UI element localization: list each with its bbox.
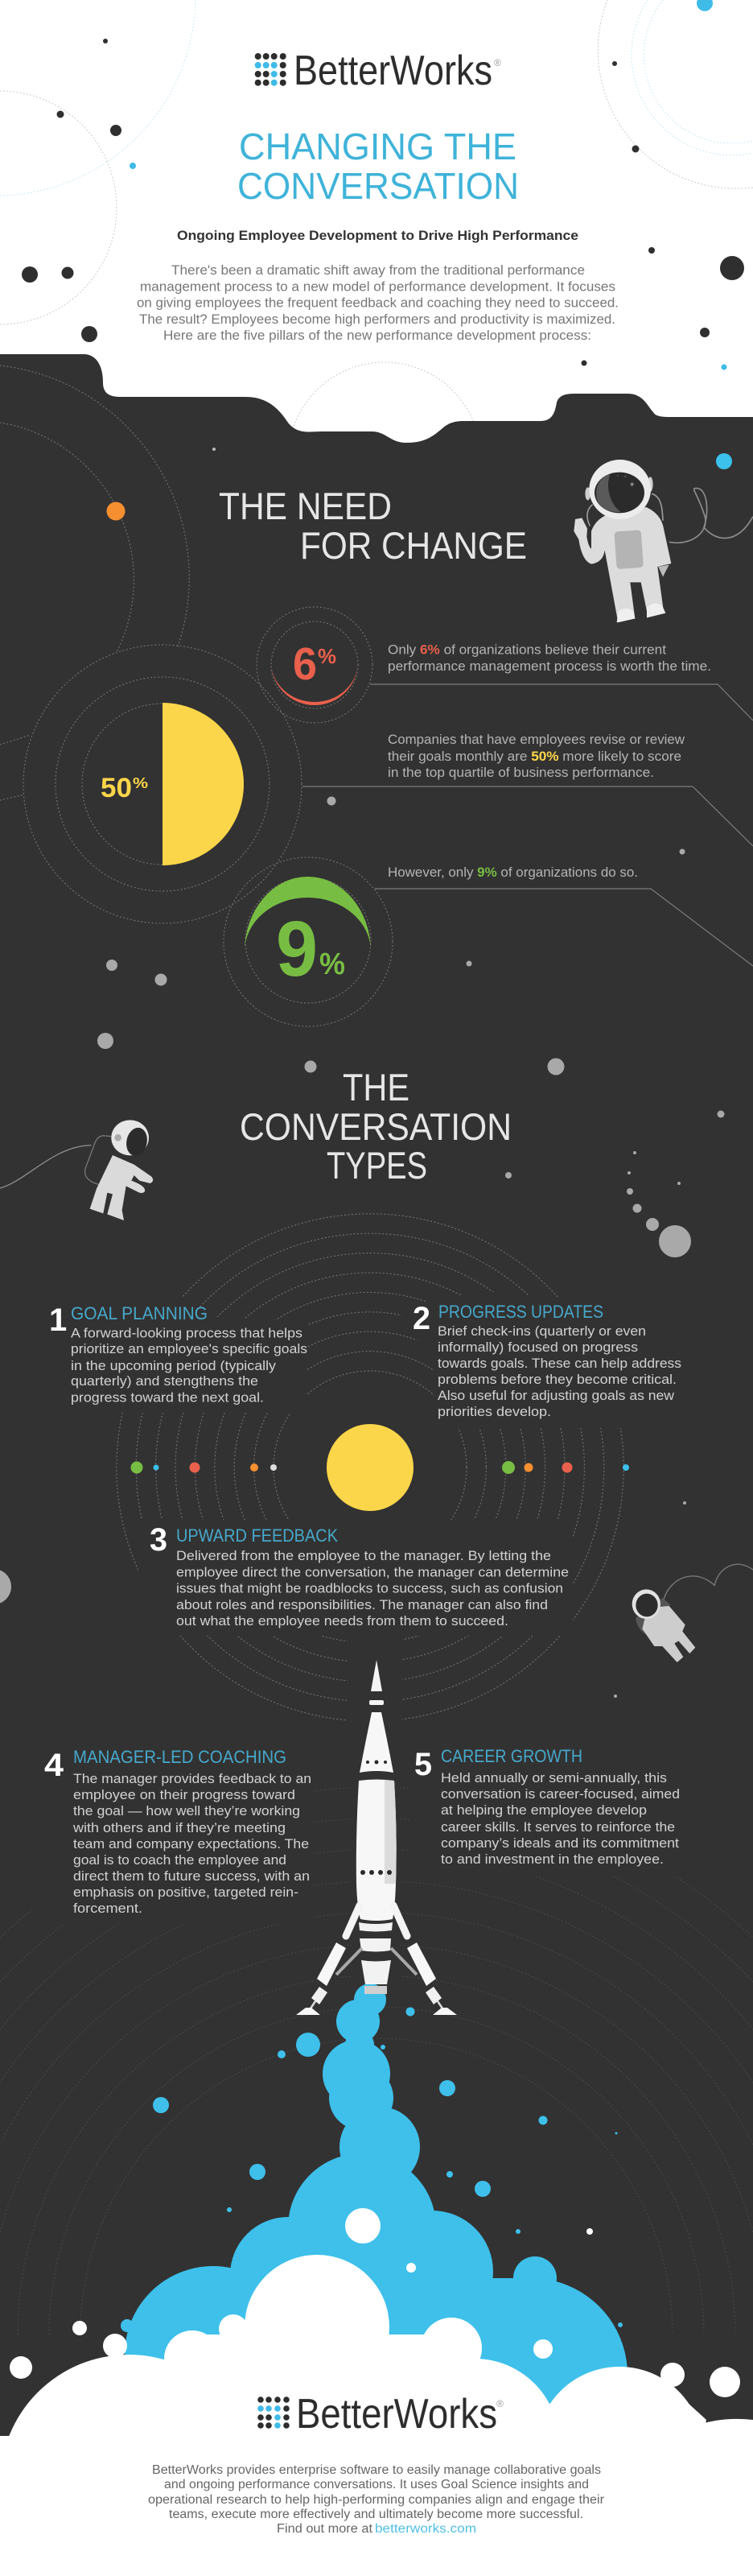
panel: 1 goal planning: progress toward the next goal. bbox=[71, 1391, 264, 1406]
chart: 50 percent half circle: 50 bbox=[101, 773, 132, 803]
panel: 4 manager-led coaching: emphasis on positive, targeted rein- bbox=[73, 1885, 298, 1900]
heading: the need for change bbox=[219, 485, 527, 567]
panel: 1 goal planning: quarterly) and stengthens the bbox=[71, 1374, 258, 1389]
footer text: betterworks.com bbox=[375, 2522, 476, 2536]
panel: 5 career growth: company’s ideals and its commitment bbox=[441, 1836, 679, 1851]
text: 50 percent stat: Companies that have employees revise or review bbox=[388, 733, 685, 747]
panel: 2 progress updates: 2 bbox=[413, 1301, 430, 1336]
space dots: coloured and grey bbox=[0, 453, 732, 1698]
panel: 2 progress updates bbox=[413, 1301, 681, 1419]
intro paragraph: There's been a dramatic shift away from the traditional performance bbox=[171, 262, 585, 278]
panel: 2 progress updates: PROGRESS UPDATES bbox=[438, 1302, 603, 1322]
logo: BetterWorks header: BetterWorks bbox=[294, 47, 492, 94]
panel: 3 upward feedback: 3 bbox=[150, 1522, 167, 1558]
panel: 3 upward feedback bbox=[150, 1522, 569, 1629]
logo: BetterWorks footer: BetterWorks bbox=[296, 2391, 497, 2438]
text: 6 percent stat: performance management process is worth the time. bbox=[388, 659, 711, 674]
text: 50 percent stat: their goals monthly are 50% more likely to score bbox=[388, 749, 681, 764]
chart: 6 percent arc: 6 bbox=[293, 638, 317, 690]
panel: 1 goal planning: in the upcoming period (typically bbox=[71, 1359, 277, 1373]
title: CONVERSATION bbox=[237, 165, 519, 207]
heading: the conversation types: THE bbox=[343, 1066, 409, 1108]
exhaust smoke and clouds bbox=[0, 1984, 753, 2576]
panel: 4 manager-led coaching: 4 bbox=[44, 1748, 64, 1783]
panel: 3 upward feedback: out what the employee needs from them to succeed. bbox=[176, 1614, 508, 1629]
footer text: Find out more at bbox=[277, 2522, 373, 2536]
chart: 9 percent arc: 9 bbox=[276, 905, 318, 993]
panel: 1 goal planning: GOAL PLANNING bbox=[71, 1303, 208, 1323]
panel: 4 manager-led coaching: goal is to coach the employee and bbox=[73, 1853, 286, 1868]
panel: 2 progress updates: towards goals. These can help address bbox=[438, 1356, 681, 1371]
panel: 4 manager-led coaching bbox=[44, 1747, 311, 1916]
chart: 50 percent half circle bbox=[101, 703, 244, 865]
panel: 2 progress updates: problems before they become critical. bbox=[438, 1373, 677, 1387]
panel: 5 career growth: 5 bbox=[414, 1747, 432, 1782]
text: 6 percent stat bbox=[388, 642, 711, 674]
icon: floating astronaut right bbox=[632, 1564, 753, 1662]
footer text: BetterWorks provides enterprise software to easily manage collaborative goals bbox=[152, 2463, 601, 2477]
panel: 3 upward feedback: issues that might be roadblocks to success, such as confusion bbox=[176, 1581, 563, 1596]
heading: the need for change: THE NEED bbox=[219, 485, 392, 527]
footer text bbox=[148, 2463, 604, 2536]
icon: waving astronaut bbox=[574, 460, 753, 622]
text: 50 percent stat: in the top quartile of business performance. bbox=[388, 766, 654, 780]
panel: 5 career growth: to and investment in the employee. bbox=[441, 1852, 664, 1867]
heading: the conversation types: CONVERSATION bbox=[240, 1105, 512, 1148]
heading: the need for change: FOR CHANGE bbox=[300, 524, 527, 567]
footer text: teams, execute more effectively and ultimately become more successful. bbox=[169, 2508, 583, 2521]
sun and planets bbox=[130, 1424, 629, 1511]
panel: need for change stats bbox=[23, 607, 753, 1026]
panel: 2 progress updates: Also useful for adjusting goals as new bbox=[438, 1389, 674, 1403]
icon: floating astronaut left bbox=[0, 1120, 153, 1220]
panel: 1 goal planning bbox=[49, 1302, 307, 1406]
faint orbit rings around rocket bbox=[0, 1727, 753, 2334]
panel: 1 goal planning: 1 bbox=[49, 1302, 67, 1338]
footer text: and ongoing performance conversations. It uses Goal Science insights and bbox=[164, 2478, 589, 2491]
panel: 5 career growth: at helping the employee develop bbox=[441, 1803, 647, 1818]
panel: 1 goal planning: prioritize an employee's specific goals bbox=[71, 1342, 307, 1356]
chart: 50 percent half circle: % bbox=[133, 775, 148, 791]
panel: 5 career growth: CAREER GROWTH bbox=[441, 1746, 582, 1766]
panel: 5 career growth: career skills. It serves to reinforce the bbox=[441, 1820, 675, 1835]
logo: BetterWorks header: ® bbox=[494, 57, 501, 68]
text: 9 percent stat: However, only 9% of organizations do so. bbox=[388, 865, 638, 880]
panel: 1 goal planning: A forward-looking process that helps bbox=[71, 1327, 302, 1341]
panel: 2 progress updates: informally) focused on progress bbox=[438, 1340, 638, 1355]
chart: 9 percent arc: % bbox=[319, 947, 345, 981]
panel: 4 manager-led coaching: direct them to future success, with an bbox=[73, 1869, 310, 1884]
icon: rocket bbox=[296, 1660, 457, 2015]
panel: 2 progress updates: priorities develop. bbox=[438, 1405, 551, 1419]
chart: 6 percent arc: % bbox=[318, 644, 336, 668]
title: CHANGING THE bbox=[239, 126, 516, 167]
panel: 3 upward feedback: employee direct the conversation, the manager can determine bbox=[176, 1566, 569, 1580]
solar system orbits bbox=[0, 1214, 753, 1727]
footer text: operational research to help high-performing companies align and engage their bbox=[148, 2493, 604, 2507]
heading: the conversation types bbox=[240, 1066, 512, 1187]
heading: the conversation types: TYPES bbox=[327, 1144, 427, 1187]
text: 6 percent stat: Only 6% of organizations believe their current bbox=[388, 642, 666, 657]
top scattered dots bbox=[22, 0, 744, 370]
chart: 6 percent arc bbox=[271, 638, 358, 705]
panel: 5 career growth bbox=[414, 1746, 680, 1867]
panel: 4 manager-led coaching: forcement. bbox=[73, 1901, 142, 1916]
panel: 5 career growth: Held annually or semi-annually, this bbox=[441, 1771, 667, 1785]
intro paragraph: Here are the five pillars of the new performance development process: bbox=[163, 328, 591, 343]
panel: 3 upward feedback: about roles and responsibilities. The manager can also find bbox=[176, 1598, 548, 1612]
chart: 9 percent arc bbox=[245, 877, 371, 993]
intro paragraph bbox=[137, 262, 619, 343]
panel: 2 progress updates: Brief check-ins (quarterly or even bbox=[438, 1324, 646, 1339]
intro paragraph: The result? Employees become high performers and productivity is maximized. bbox=[139, 312, 615, 327]
title bbox=[237, 126, 519, 207]
intro paragraph: on giving employees the frequent feedback and coaching they need to succeed. bbox=[137, 295, 619, 311]
text: 50 percent stat bbox=[388, 733, 685, 780]
panel: 5 career growth: conversation is career-focused, aimed bbox=[441, 1787, 680, 1802]
subtitle: Ongoing Employee Development to Drive High Performance bbox=[177, 228, 578, 243]
logo: BetterWorks footer: ® bbox=[496, 2398, 504, 2409]
intro paragraph: management process to a new model of performance development. It focuses bbox=[140, 279, 615, 295]
panel: 3 upward feedback: UPWARD FEEDBACK bbox=[176, 1525, 338, 1546]
panel: 4 manager-led coaching: team and company expectations. The bbox=[73, 1837, 309, 1852]
panel: 4 manager-led coaching: MANAGER-LED COACHING bbox=[73, 1747, 286, 1767]
panel: 4 manager-led coaching: employee on their progress toward bbox=[73, 1788, 295, 1802]
panel: 4 manager-led coaching: The manager provides feedback to an bbox=[73, 1772, 311, 1786]
panel: 3 upward feedback: Delivered from the employee to the manager. By letting the bbox=[176, 1549, 551, 1563]
panel: 4 manager-led coaching: with others and if they’re meeting bbox=[72, 1821, 286, 1835]
panel: 4 manager-led coaching: the goal — how well they’re working bbox=[73, 1804, 300, 1818]
